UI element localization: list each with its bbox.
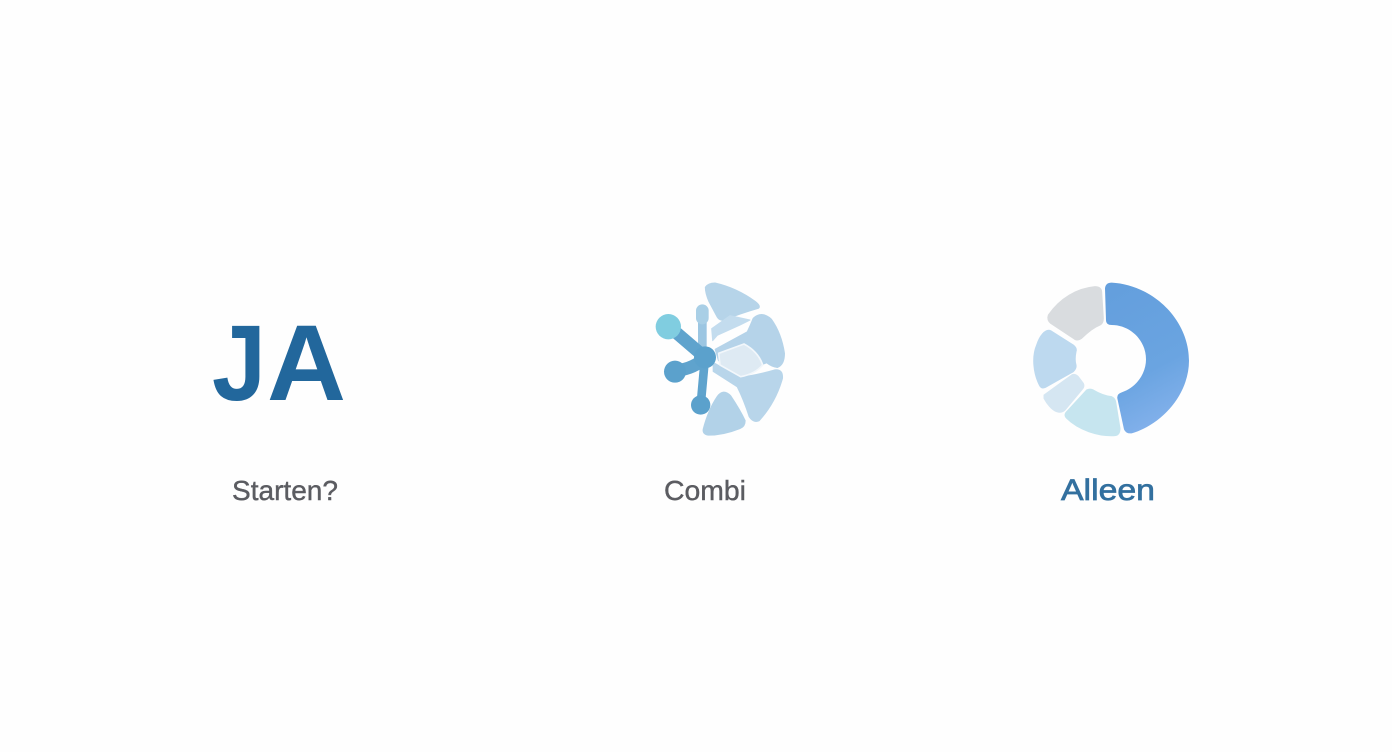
segment: center pale [719,344,763,377]
donut segment: large blue [1105,283,1189,433]
label: Starten?: Starten? [232,475,338,506]
segment: top [706,283,759,320]
segment: thin chevron [712,316,750,341]
logo: JA lettermark: A [267,302,346,423]
segment: lower right [713,363,782,421]
label: Combi: Combi [664,475,746,506]
icon: molecule and brain segments [656,283,784,435]
label: Alleen: Alleen [1061,474,1155,507]
donut segment: bottom aqua [1065,389,1120,436]
molecule: bonds [670,313,705,405]
molecule: hub node [694,346,716,368]
segment: upper right [715,315,784,370]
molecule: top pill node [696,304,709,324]
molecule: bottom node [691,395,710,415]
segment: bottom [703,392,745,435]
molecule: left node [664,361,686,383]
molecule: light node [656,314,681,339]
chart: donut [1034,283,1189,436]
logo: JA lettermark [212,302,346,423]
donut segment: left blue [1034,330,1076,388]
donut segment: grey [1048,287,1103,340]
logo: JA lettermark: J [212,302,266,423]
donut segment: small pale [1044,374,1084,412]
